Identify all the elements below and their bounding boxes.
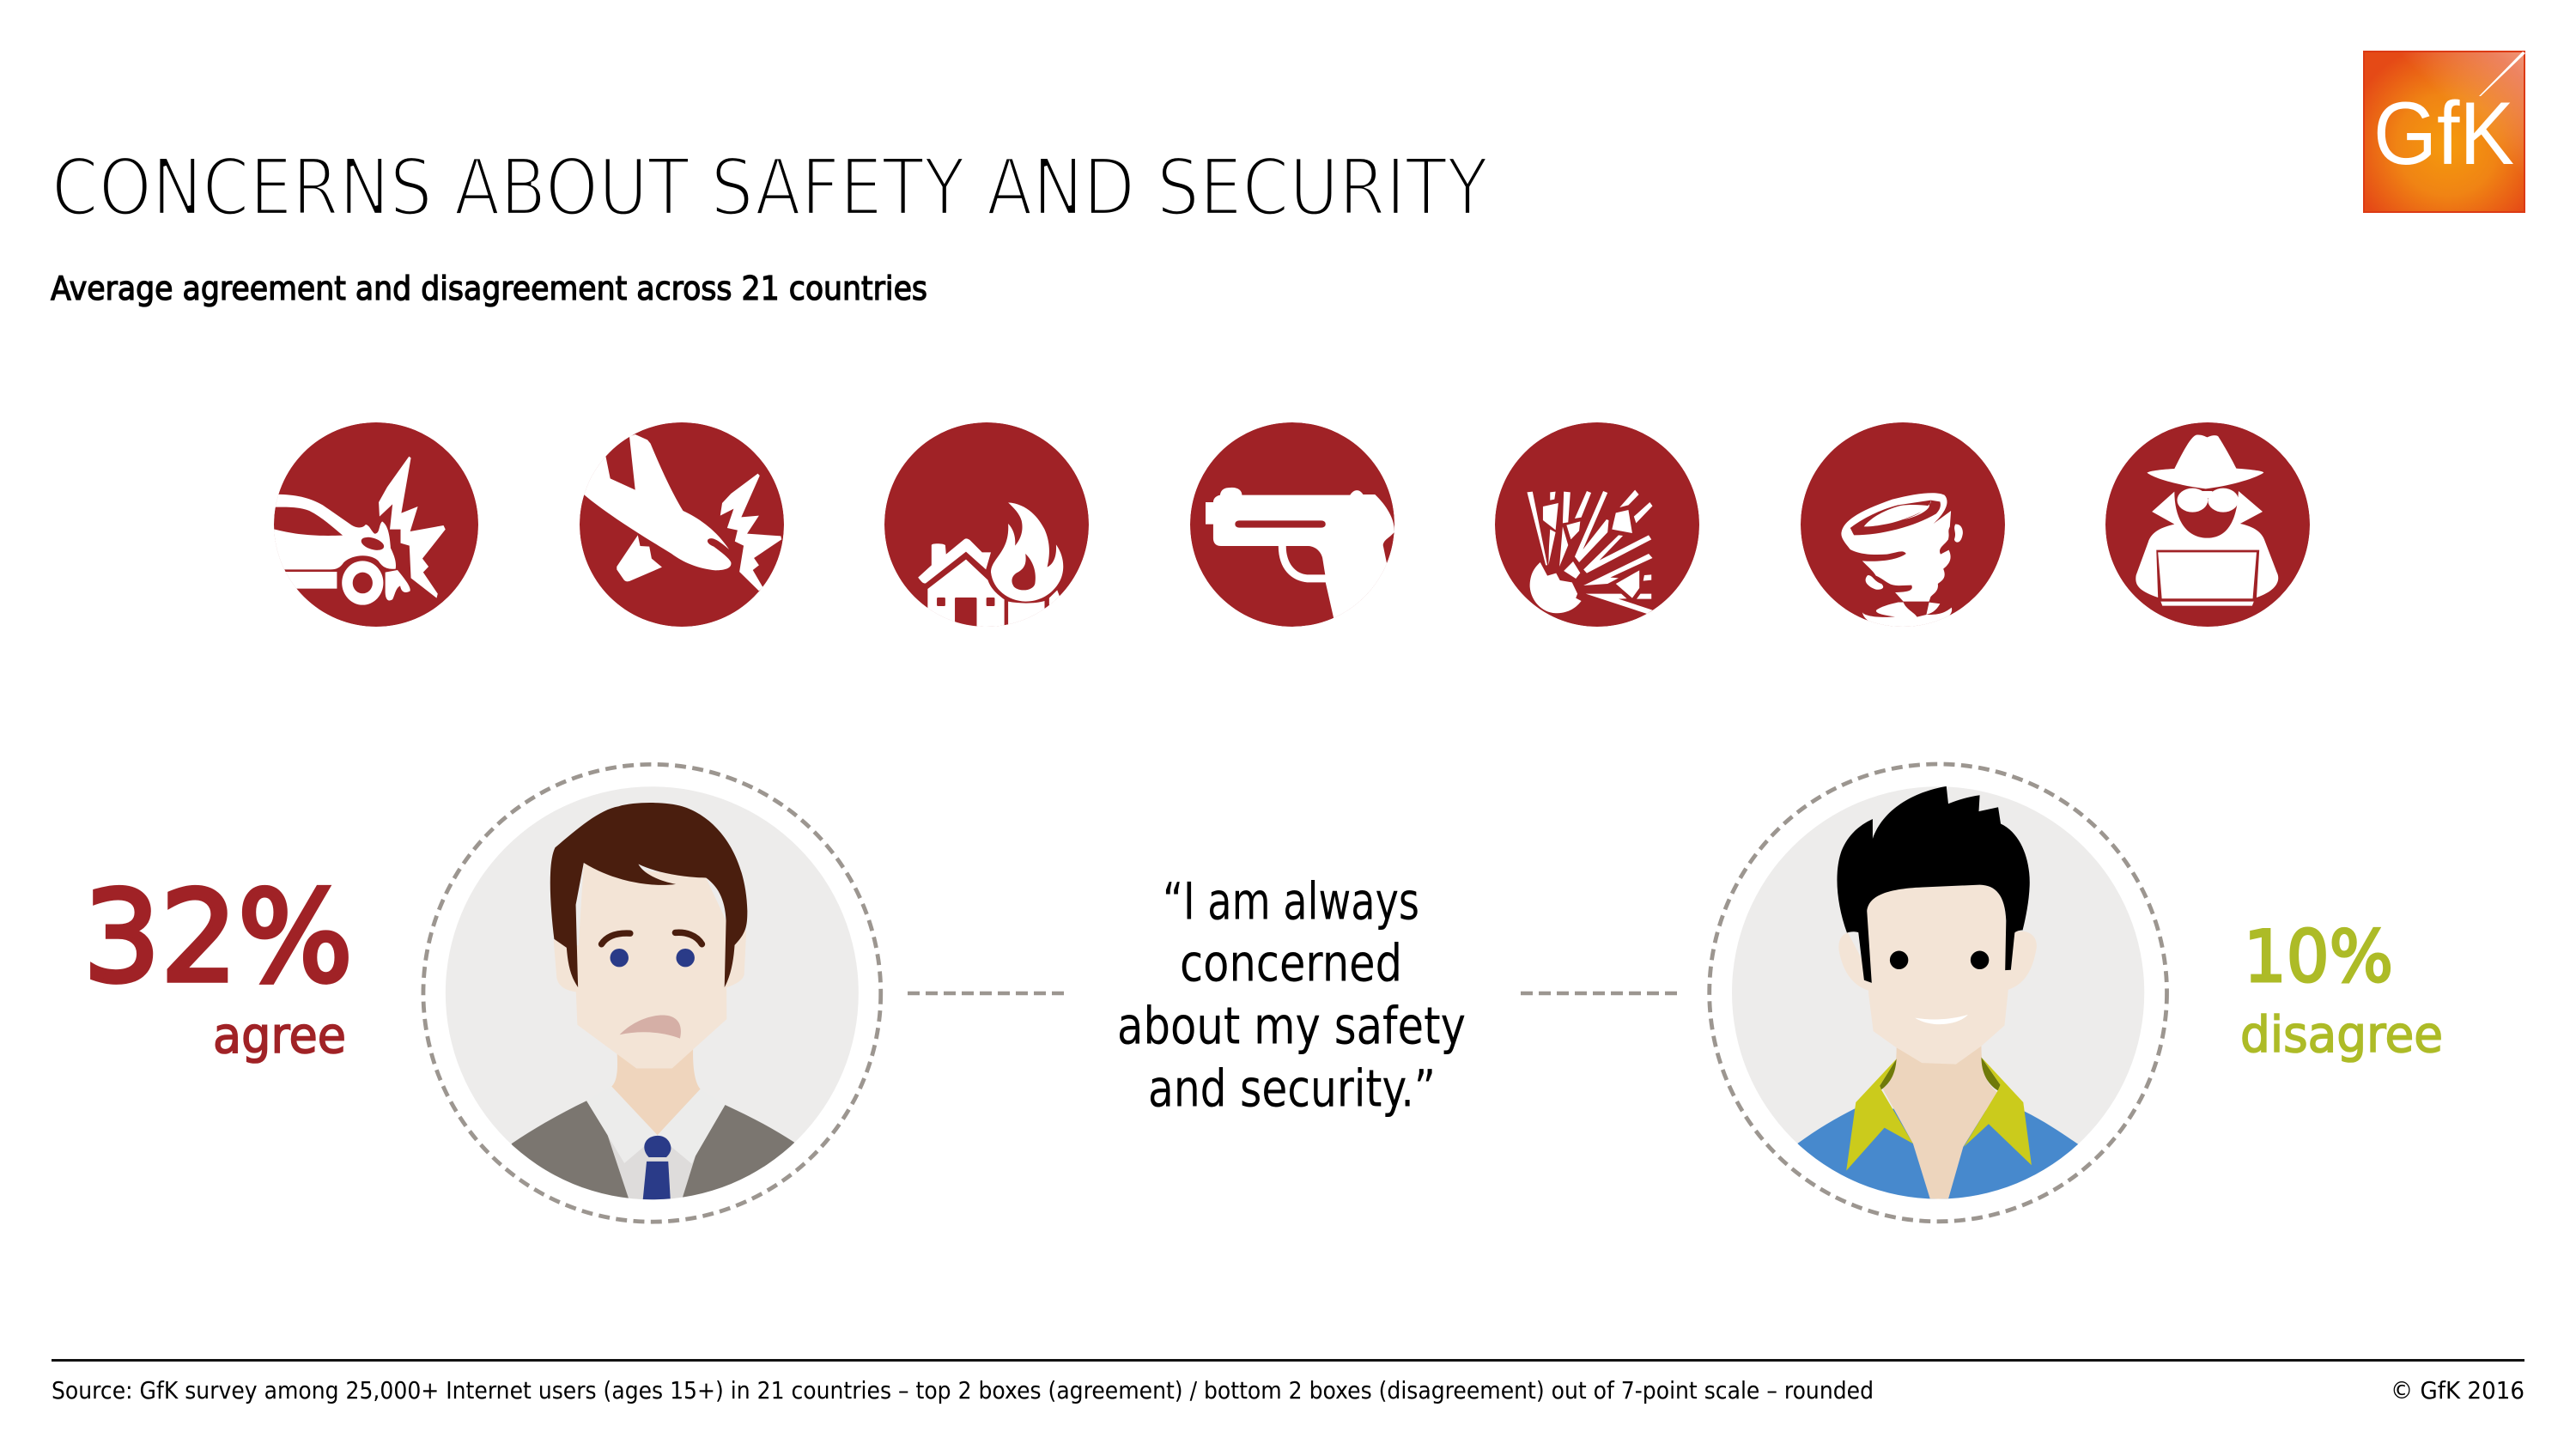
quote: and security.” bbox=[1148, 1059, 1436, 1119]
stat: 10% disagree bbox=[2240, 915, 2443, 1064]
icon: house fire bbox=[884, 422, 1089, 633]
portrait: smiling man bbox=[1710, 764, 2167, 1222]
icon: explosion bbox=[1495, 422, 1699, 627]
copyright: © GfK 2016 bbox=[2391, 1377, 2524, 1404]
footer rule bbox=[52, 1359, 2524, 1362]
icon: handgun bbox=[1190, 422, 1394, 627]
icon: car crash bbox=[269, 422, 478, 627]
quote: “I am always bbox=[1163, 872, 1419, 932]
connector: left dashes bbox=[908, 992, 1065, 995]
quote: concerned bbox=[1180, 934, 1402, 994]
icon: hacker bbox=[2105, 422, 2310, 627]
stat: 32% agree: 32% bbox=[83, 865, 353, 1010]
icon: tornado bbox=[1801, 422, 2005, 628]
title: CONCERNS ABOUT SAFETY AND SECURITY bbox=[52, 142, 1489, 234]
subtitle: Average agreement and disagreement across 21 countries bbox=[51, 270, 927, 308]
stat: 32% agree: agree bbox=[213, 1006, 346, 1065]
source note: Source: GfK survey among 25,000+ Internet users (ages 15+) in 21 countries – top 2 boxes (agreement) / bottom 2 boxes (disagreement) out of 7-point scale – rounded bbox=[52, 1377, 1874, 1404]
quote: about my safety bbox=[1117, 996, 1466, 1056]
logo: GfK bbox=[2363, 51, 2525, 213]
stat: 10% disagree: disagree bbox=[2240, 1005, 2443, 1064]
stat: 10% disagree: 10% bbox=[2244, 915, 2393, 998]
quote bbox=[1117, 872, 1466, 1119]
icon: plane crash bbox=[576, 422, 784, 627]
connector: right dashes bbox=[1521, 992, 1678, 995]
logo: GfK: GfK bbox=[2373, 84, 2514, 184]
portrait: worried man bbox=[423, 764, 881, 1222]
